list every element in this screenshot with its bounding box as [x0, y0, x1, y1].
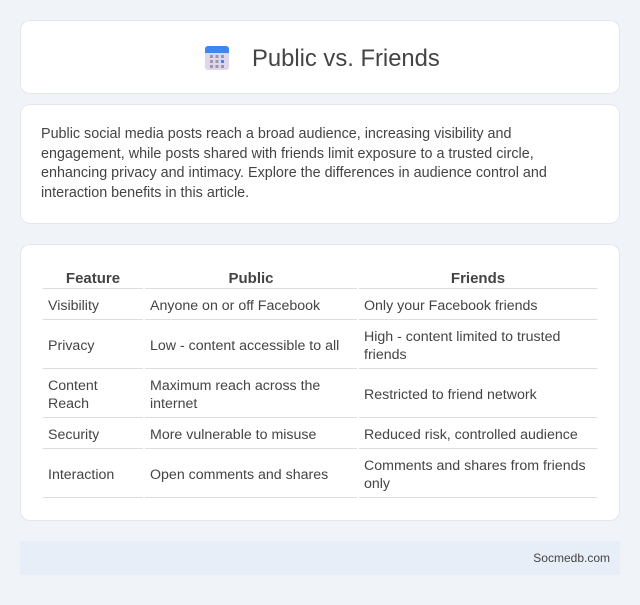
row: Interaction: Comments and shares from friends	[364, 458, 586, 474]
row: Privacy	[48, 329, 560, 363]
row: Content Reach: Restricted to friend network	[364, 387, 537, 403]
row: Content Reach: internet	[150, 396, 197, 412]
row: Security	[48, 427, 578, 443]
row: Security: Security	[48, 427, 99, 443]
row: Security: More vulnerable to misuse	[150, 427, 316, 443]
icon: calendar	[205, 46, 229, 70]
row: Interaction	[48, 458, 586, 492]
row: Content Reach: Maximum reach across the	[150, 378, 320, 394]
table header: Public	[228, 270, 274, 287]
row: Security: Reduced risk, controlled audience	[364, 427, 578, 443]
row: Privacy: Privacy	[48, 338, 95, 354]
row: Interaction: only	[364, 476, 390, 492]
footer bar	[20, 541, 620, 575]
row: Privacy: High - content limited to trusted	[364, 329, 560, 345]
intro text: enhancing privacy and intimacy. Explore the differences in audience control and	[41, 165, 547, 181]
table header: Friends	[451, 270, 505, 287]
row: Content Reach: Content	[48, 378, 98, 394]
row: Visibility: Visibility	[48, 298, 99, 314]
panel: comparison table	[20, 244, 620, 521]
table header	[66, 270, 505, 287]
row: Interaction: Open comments and shares	[150, 467, 328, 483]
intro text: interaction benefits in this article.	[41, 184, 249, 200]
panel: title card	[20, 20, 620, 94]
row: Interaction: Interaction	[48, 467, 114, 483]
row: Content Reach	[48, 378, 537, 412]
intro text: Public social media posts reach a broad audience, increasing visibility and	[41, 126, 511, 142]
footer text: Socmedb.com	[533, 551, 610, 565]
panel: introduction	[20, 104, 620, 224]
row: Visibility: Anyone on or off Facebook	[150, 298, 320, 314]
intro text: engagement, while posts shared with friends limit exposure to a trusted circle,	[41, 146, 534, 162]
row: Visibility: Only your Facebook friends	[364, 298, 538, 314]
row: Content Reach: Reach	[48, 396, 89, 412]
title: Public vs. Friends	[252, 45, 440, 72]
row: Privacy: friends	[364, 347, 407, 363]
row: Visibility	[48, 298, 538, 314]
intro text	[41, 126, 547, 200]
row: Privacy: Low - content accessible to all	[150, 338, 339, 354]
table header: Feature	[66, 270, 120, 287]
